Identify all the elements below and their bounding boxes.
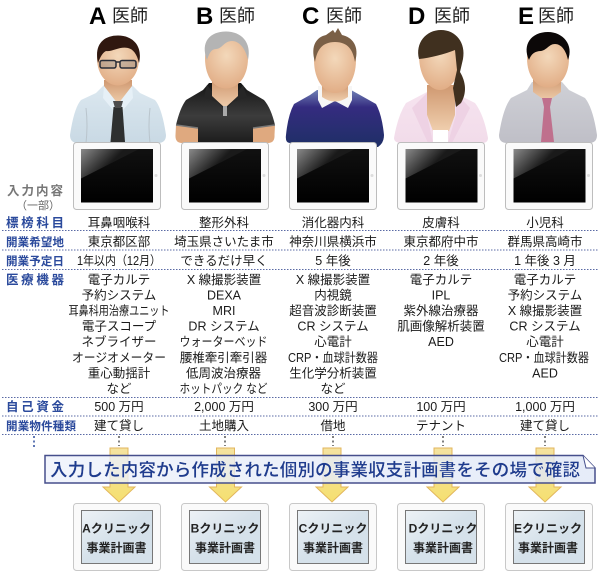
heading: doctor E [518,3,574,30]
plan tablet: A clinic [74,504,160,570]
row: desired location: 群馬県高崎市 [507,234,583,249]
plan tablet: D clinic: Dクリニック [409,522,477,536]
row: medical equipment: 予約システム [508,288,582,302]
row: medical equipment: オージオメーター [72,351,166,365]
heading: doctor D: D [408,3,425,30]
row: desired location: 埼玉県さいたま市 [174,235,274,249]
plan tablet: A clinic: 事業計画書 [86,540,147,555]
heading: doctor A: A [89,3,106,30]
row: own funds: 自己資金 [6,399,64,414]
row: property type: テナント [416,419,466,433]
plan tablet: D clinic [398,504,484,570]
arrow: B [210,448,242,502]
icon: doctor C portrait [286,28,384,147]
row: medical equipment: 医療機器 [6,272,64,287]
banner callout: 入力した内容から作成された個別の事業収支計画書をその場で確認 [50,460,581,480]
icon: doctor A portrait [70,36,166,143]
heading: doctor E: 医師 [538,6,574,26]
row: medical equipment: 低周波治療器 [186,366,261,380]
row: medical equipment: CRP・血球計数器 [288,350,378,365]
row: medical equipment: 予約システム [82,288,156,302]
row: medical equipment: 電子カルテ [88,273,150,287]
row: own funds: 1,000 万円 [515,400,575,414]
row: desired location: 神奈川県横浜市 [289,234,377,249]
icon: doctor B portrait [175,32,275,143]
row: own funds: 100 万円 [416,400,466,414]
banner callout [45,456,595,483]
heading: doctor C: 医師 [326,6,362,26]
row: medical equipment: 腰椎牽引牽引器 [180,351,268,365]
heading: doctor A [89,3,148,30]
row: property type: 借地 [320,419,346,433]
arrow: E [529,448,561,502]
row: own funds [6,399,575,414]
row: medical equipment: 肌画像解析装置 [397,320,485,334]
plan tablet: E clinic: Eクリニック [514,522,582,536]
plan tablet: E clinic [506,504,592,570]
icon: doctor E portrait [499,32,597,143]
row: medical equipment: 心電計 [526,334,564,349]
row: medical equipment: DEXA [207,288,242,302]
row: property type: 建て貸し [520,418,570,433]
row: property type: 建て貸し [94,418,144,433]
row: medical equipment: 心電計 [314,334,352,349]
row: medical equipment: 電子カルテ [410,273,472,287]
plan tablet: B clinic: Bクリニック [191,522,259,536]
label: input contents: （一部） [16,199,60,212]
row: medical equipment: MRI [213,304,235,318]
label: input contents [7,183,65,212]
row: planned opening [6,254,576,268]
icon: tablet C [290,142,376,210]
row: medical equipment: AED [428,335,454,349]
plan tablet: B clinic: 事業計画書 [195,540,255,555]
row: property type [6,418,570,433]
row: medical equipment: 耳鼻科用治療ユニット [68,303,170,318]
row: medical equipment: ウォーターベッド [180,335,268,349]
label: input contents: 入力内容 [7,183,65,198]
row: specialty: 整形外科 [199,216,249,230]
row: desired location: 東京都府中市 [403,234,479,249]
row: medical equipment: DR システム [188,320,260,334]
arrow: C [316,448,348,502]
heading: doctor A: 医師 [112,6,148,26]
row: specialty: 標榜科目 [6,215,64,230]
row: medical equipment: IPL [432,288,450,302]
row: medical equipment: CR システム [509,320,581,334]
row: property type: 開業物件種類 [6,419,76,433]
plan tablet: C clinic: Cクリニック [299,522,367,536]
arrow: D [427,448,459,502]
arrow: A [103,448,135,502]
row: own funds: 500 万円 [94,400,144,414]
plan tablet: A clinic: Aクリニック [82,522,151,536]
row: planned opening: できるだけ早く [180,254,268,268]
row: medical equipment: など [320,382,346,396]
row: medical equipment [6,272,589,396]
icon: doctor D portrait [394,30,488,143]
row: own funds: 2,000 万円 [194,400,254,414]
row: medical equipment: 重心動揺計 [88,366,151,380]
heading: doctor D: 医師 [434,6,470,26]
plan tablet: E clinic: 事業計画書 [518,540,578,555]
heading: doctor B [196,3,255,30]
row: specialty: 耳鼻咽喉科 [88,215,151,230]
row: medical equipment: AED [532,366,558,380]
plan tablet: D clinic: 事業計画書 [413,540,473,555]
row: medical equipment: 内視鏡 [314,288,352,302]
row: specialty [6,215,564,230]
heading: doctor B: 医師 [219,6,255,26]
heading: doctor D [408,3,470,30]
row: planned opening: 1年以内（12月） [77,254,161,268]
icon: tablet E [506,142,592,210]
row: planned opening: 5 年後 [315,254,351,268]
row: medical equipment: ネブライザー [81,334,157,349]
row: own funds: 300 万円 [308,400,358,414]
heading: doctor E: E [518,3,534,30]
row: specialty: 皮膚科 [422,215,460,230]
row: planned opening: 開業予定日 [6,254,64,268]
row: planned opening: 1 年後 3 月 [514,254,576,268]
row: planned opening: 2 年後 [423,254,459,268]
row: medical equipment: ホットパック など [180,382,268,396]
row: medical equipment: 電子カルテ [514,273,576,287]
plan tablet: B clinic [182,504,268,570]
row: medical equipment: 紫外線治療器 [403,303,479,318]
icon: tablet D [398,142,484,210]
icon: tablet B [182,142,268,210]
heading: doctor B: B [196,3,213,30]
row: medical equipment: 生化学分析装置 [289,366,377,380]
row: specialty: 小児科 [526,216,564,230]
plan tablet: C clinic [290,504,376,570]
row: specialty: 消化器内科 [302,216,365,230]
row: property type: 土地購入 [199,419,249,433]
row: medical equipment: X 線撮影装置 [187,272,261,287]
row: medical equipment: CRP・血球計数器 [499,350,589,365]
icon: tablet A [74,142,160,210]
row: medical equipment: 超音波診断装置 [289,303,377,318]
row: desired location [6,234,583,249]
row: desired location: 東京都区部 [88,235,151,249]
plan tablet: C clinic: 事業計画書 [303,540,363,555]
heading: doctor C [302,3,362,30]
heading: doctor C: C [302,3,319,30]
row: medical equipment: CR システム [297,320,369,334]
row: medical equipment: 電子スコープ [82,320,157,334]
row: medical equipment: など [106,382,132,396]
row: medical equipment: X 線撮影装置 [296,272,370,287]
row: medical equipment: X 線撮影装置 [508,303,582,318]
row: desired location: 開業希望地 [6,235,64,249]
